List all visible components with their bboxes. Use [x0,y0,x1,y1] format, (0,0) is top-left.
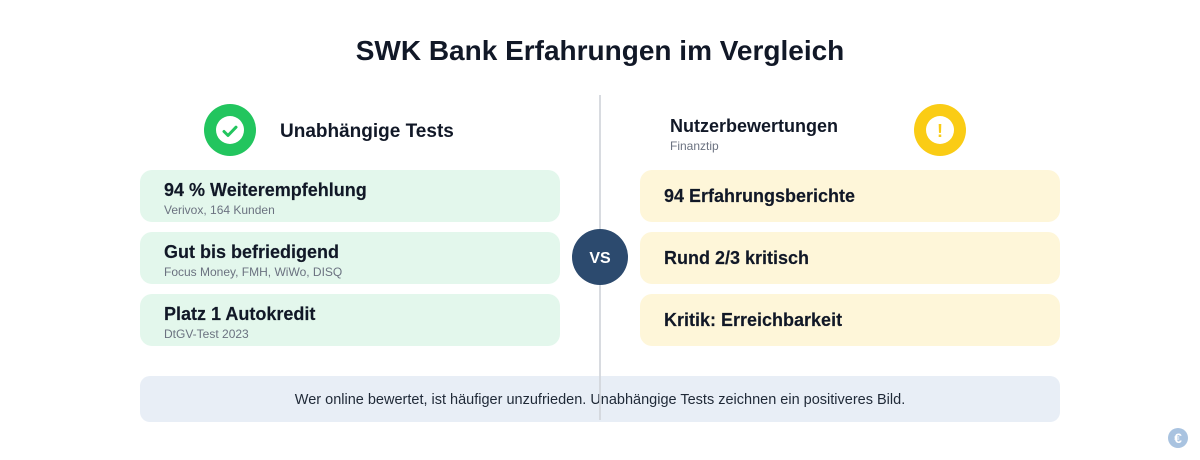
heading: user ratings: Nutzerbewertungen [670,116,838,136]
center divider [599,95,601,420]
heading: user ratings: Finanztip [670,139,719,153]
card: critical share [640,232,1060,284]
title: SWK Bank Erfahrungen im Vergleich [356,35,844,66]
card: auto loan: Platz 1 Autokredit [164,304,315,324]
card: rating [140,232,560,284]
heading: user ratings [670,116,838,153]
card: reports: 94 Erfahrungsberichte [664,186,855,206]
card: auto loan [140,294,560,346]
vs badge [572,229,628,285]
card: rating: Gut bis befriedigend [164,242,339,262]
heading: independent tests: Unabhängige Tests [280,121,454,142]
card: criticism [640,294,1060,346]
icon: euro logo [1168,428,1188,448]
panel: summary bar [140,376,1060,422]
icon: yellow warning: ! [937,121,943,141]
icon: yellow warning [914,104,966,156]
icon: euro logo: € [1174,430,1182,446]
card: recommendation [140,170,560,222]
summary text: Wer online bewertet, ist häufiger unzufrieden. Unabhängige Tests zeichnen ein positiveres Bild. [295,392,905,408]
icon: green check [204,104,256,156]
vs badge: VS [589,250,611,267]
card: reports [640,170,1060,222]
card: recommendation: 94 % Weiterempfehlung [164,180,367,200]
card: criticism: Kritik: Erreichbarkeit [664,310,842,330]
card: auto loan: DtGV-Test 2023 [164,327,249,341]
card: critical share: Rund 2/3 kritisch [664,248,809,268]
card: rating: Focus Money, FMH, WiWo, DISQ [164,265,342,279]
card: recommendation: Verivox, 164 Kunden [164,203,275,217]
